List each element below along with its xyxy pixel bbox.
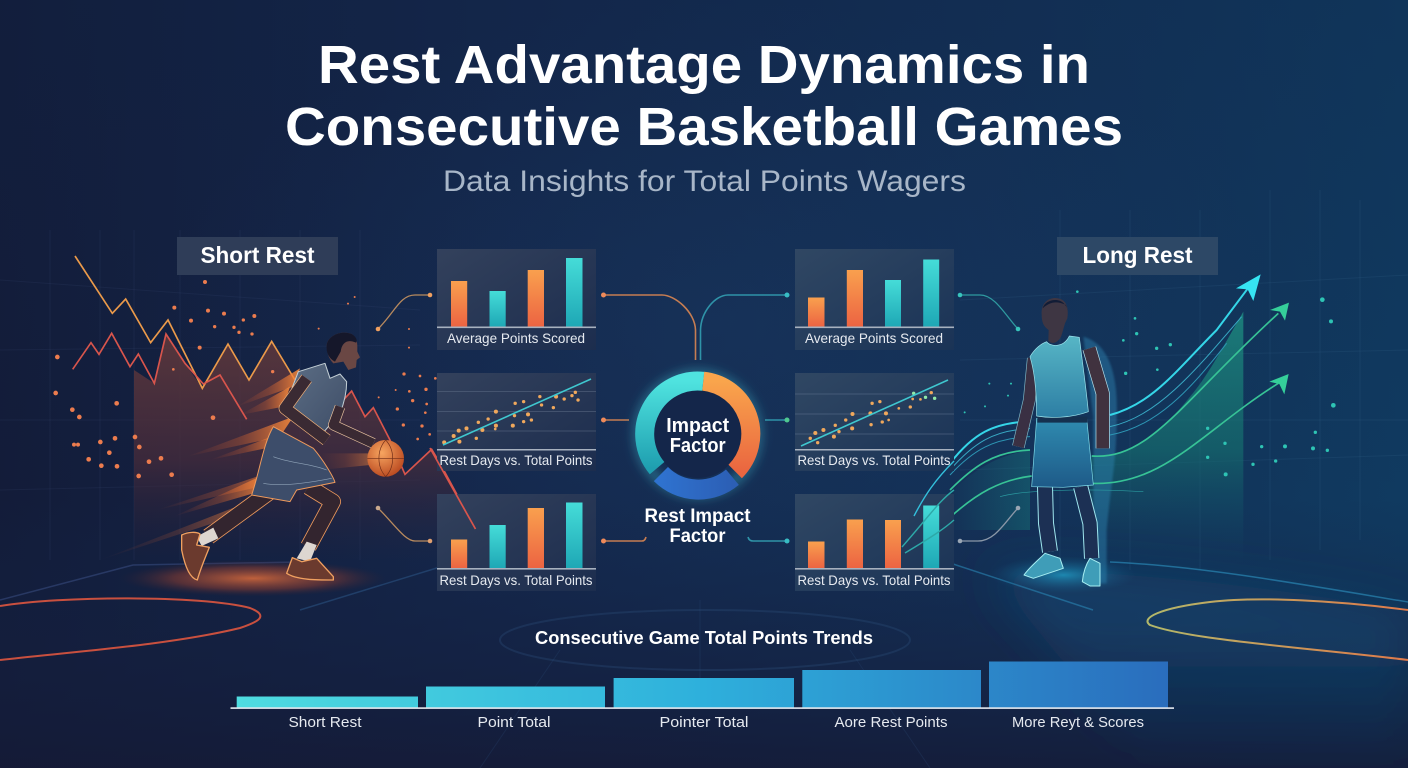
donut: impact factor bbox=[638, 374, 758, 494]
floor glow bbox=[120, 560, 387, 597]
panel: long rest scene bbox=[950, 274, 1336, 593]
bar chart: total points trends bbox=[230, 662, 1174, 731]
right leg bbox=[1081, 487, 1092, 558]
donut: impact factor: Factor bbox=[670, 435, 726, 457]
panel: rest days scatter, right bbox=[795, 373, 954, 471]
falling trend lines bbox=[73, 256, 476, 529]
glow behind player bbox=[1083, 337, 1117, 583]
donut segment: orange bbox=[703, 381, 751, 472]
donut label: Impact bbox=[666, 415, 730, 437]
falling trend area bbox=[134, 334, 475, 563]
bar chart: total points trends: Short Rest bbox=[288, 714, 362, 731]
panel: rest days scatter, left bbox=[437, 373, 596, 471]
motion streaks bbox=[100, 368, 370, 560]
title: Consecutive Basketball Games bbox=[285, 97, 1123, 157]
shoes bbox=[1024, 553, 1063, 578]
label: long rest bbox=[1057, 237, 1218, 275]
panel: average points scored, right: Average Points Scored bbox=[805, 330, 943, 346]
scattered points bbox=[53, 280, 437, 478]
label: short rest bbox=[177, 237, 338, 275]
caption: rest impact factor: Factor bbox=[670, 526, 726, 547]
player: dribbling bbox=[182, 333, 404, 580]
floor glow bbox=[990, 557, 1137, 593]
shorts bbox=[252, 427, 335, 502]
front sock bbox=[297, 542, 317, 562]
connectors bbox=[376, 292, 1020, 544]
bar chart: total points trends: Aore Rest Points bbox=[834, 714, 948, 731]
heading: trends: Consecutive Game Total Points Trends bbox=[535, 628, 873, 648]
arrowheads bbox=[1236, 274, 1289, 394]
jersey bbox=[1030, 336, 1088, 417]
rising trend area bbox=[1090, 312, 1243, 563]
bar chart: total points trends: Point Total bbox=[478, 714, 550, 731]
bar chart: total points trends: More Reyt & Scores bbox=[1012, 714, 1144, 731]
head bbox=[1042, 298, 1068, 343]
caption: rest impact factor bbox=[644, 506, 751, 547]
panel: rest days scatter, right: Rest Days vs. Total Points bbox=[798, 452, 950, 468]
red trend overlap on left panels bbox=[430, 448, 476, 529]
jersey bbox=[285, 363, 347, 438]
shorts bbox=[1032, 418, 1093, 487]
left leg bbox=[1045, 487, 1050, 552]
scattered points bbox=[964, 290, 1336, 476]
bar chart: total points trends: Pointer Total bbox=[660, 714, 748, 731]
arms bbox=[1018, 358, 1033, 447]
back sock bbox=[197, 528, 218, 546]
donut segment: blue bbox=[661, 474, 732, 490]
player: standing bbox=[1018, 298, 1103, 586]
panel: average points scored, right bbox=[795, 249, 954, 350]
donut segment: teal bbox=[645, 381, 703, 468]
subtitle: Data Insights for Total Points Wagers bbox=[443, 165, 966, 198]
label: short rest: Short Rest bbox=[200, 242, 315, 268]
caption: rest impact factor: Rest Impact bbox=[644, 506, 751, 527]
panel: average points scored, left bbox=[437, 249, 596, 350]
panel: rest days scatter, left: Rest Days vs. Total Points bbox=[440, 452, 592, 468]
front shoe bbox=[287, 558, 333, 580]
front leg bbox=[308, 487, 333, 547]
panel: rest days bars, left: Rest Days vs. Total Points bbox=[440, 572, 592, 588]
panel: average points scored, left: Average Points Scored bbox=[447, 330, 585, 346]
curve overlap on right panels bbox=[902, 461, 954, 553]
panel: short rest scene bbox=[53, 256, 476, 597]
title bbox=[285, 35, 1123, 157]
panel: rest days bars, right: Rest Days vs. Total Points bbox=[798, 572, 950, 588]
panel: rest days bars, right bbox=[795, 494, 954, 591]
court floor lines bbox=[0, 562, 1408, 768]
back shoe bbox=[182, 532, 209, 580]
back leg bbox=[208, 487, 277, 537]
rising curves with arrows bbox=[950, 283, 1278, 517]
label: long rest: Long Rest bbox=[1082, 242, 1193, 268]
panel: rest days bars, left bbox=[437, 494, 596, 591]
title: Rest Advantage Dynamics in bbox=[318, 35, 1090, 95]
